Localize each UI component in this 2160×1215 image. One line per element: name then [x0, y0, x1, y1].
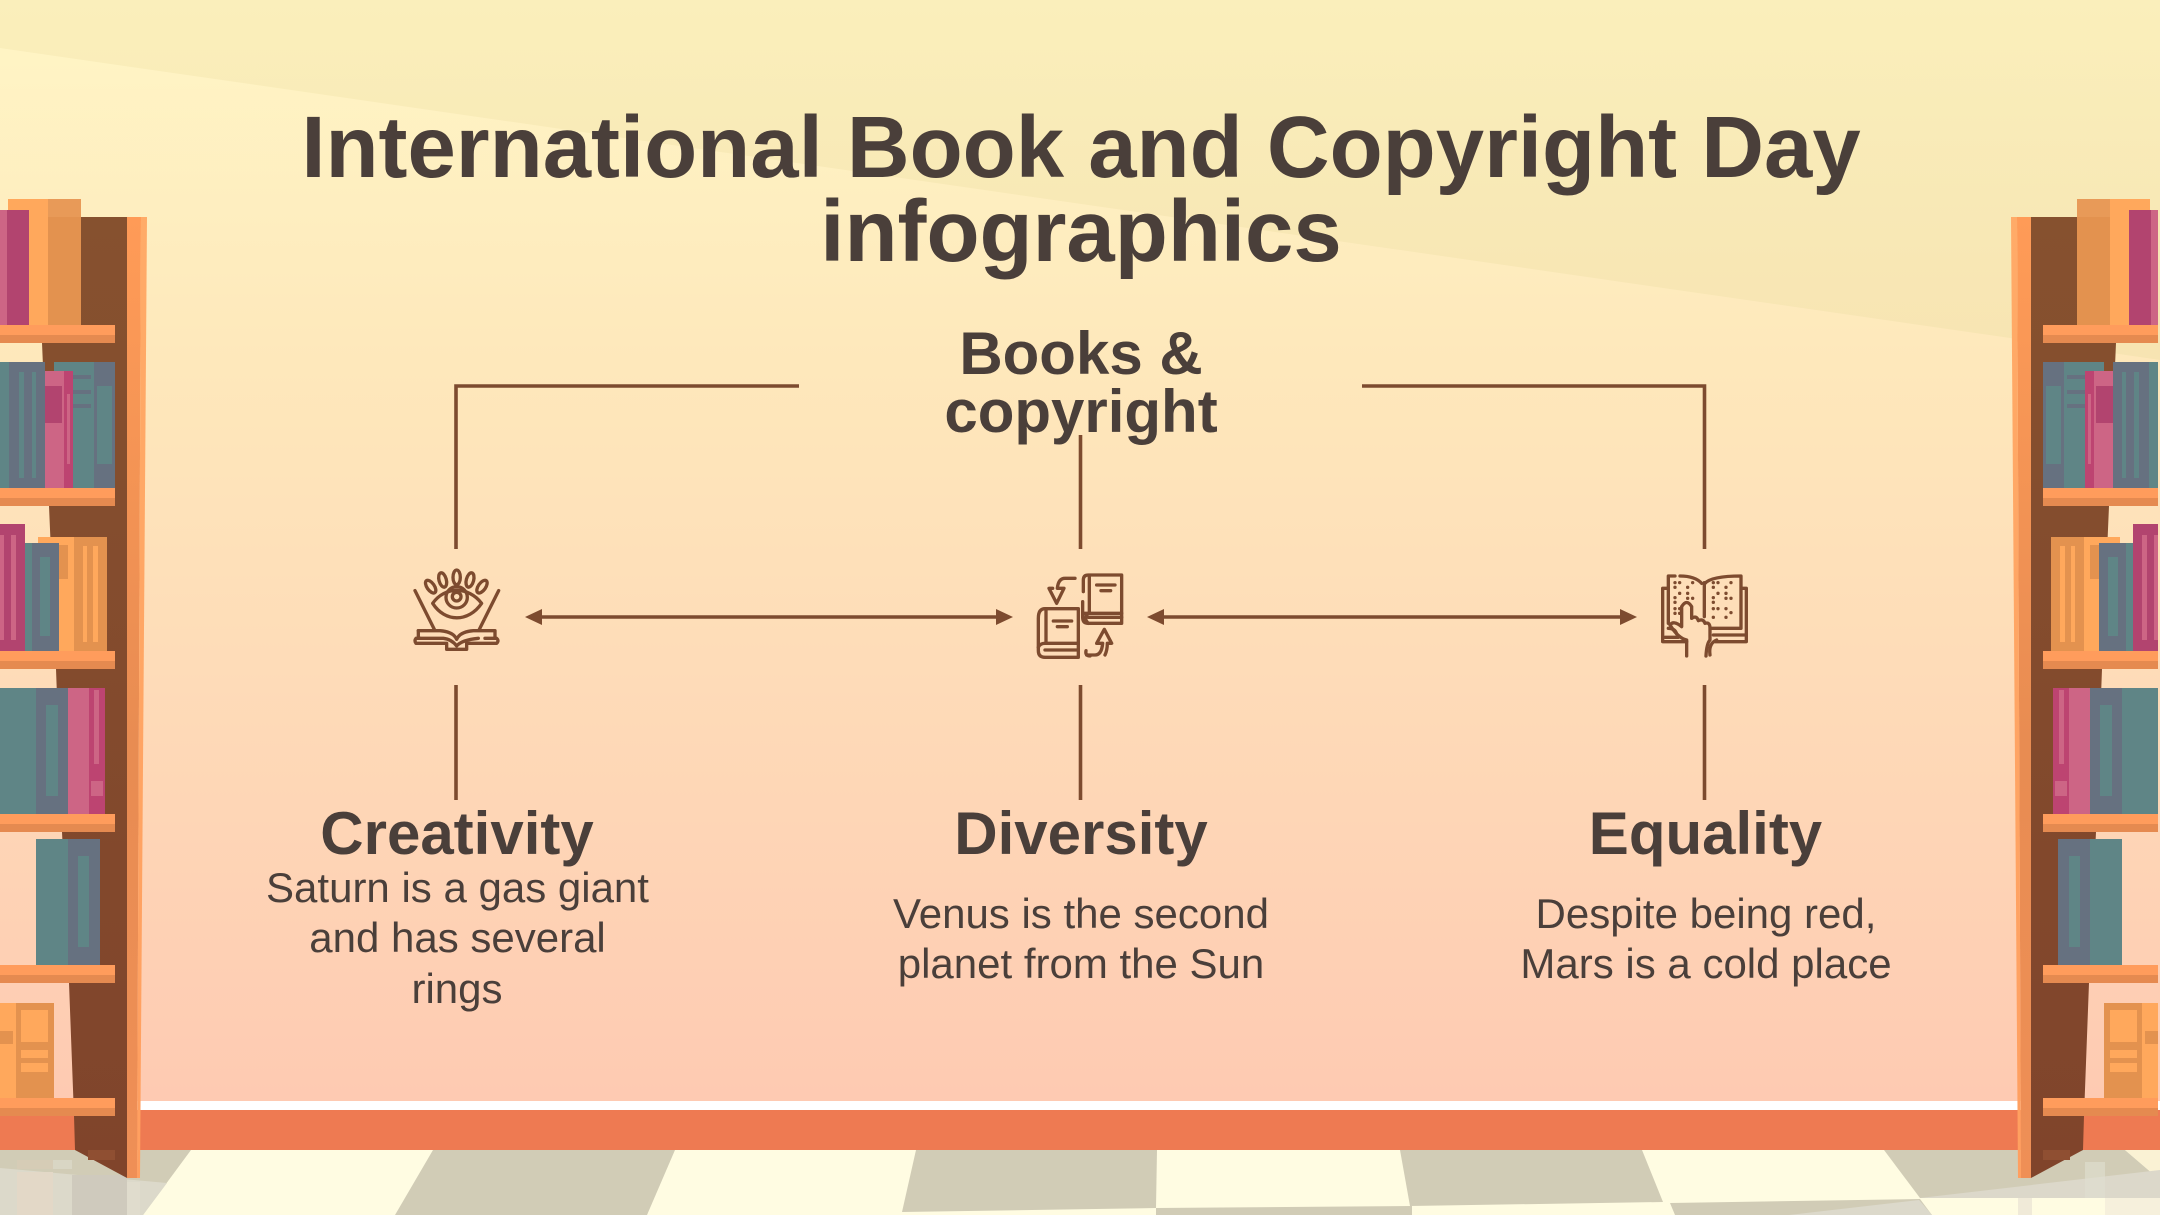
third shelf books	[0, 524, 107, 651]
icon: braille book with hand	[1663, 576, 1746, 656]
block: equality: Despite being red,	[1536, 890, 1876, 937]
second shelf books	[0, 362, 115, 488]
block: equality: Mars is a cold place	[1520, 940, 1892, 987]
top shelf books	[0, 199, 81, 325]
central heading	[944, 320, 1218, 445]
central heading: copyright	[944, 378, 1218, 445]
icon: eye over book	[415, 570, 499, 649]
block: creativity	[266, 800, 649, 1012]
floor reflection left	[0, 1160, 167, 1215]
connector lines	[456, 386, 1704, 800]
block: creativity: and has several	[309, 914, 606, 961]
arrow: diversity to equality	[1147, 609, 1637, 625]
title: International Book and Copyright Day	[301, 99, 1861, 196]
block: diversity: planet from the Sun	[898, 940, 1264, 987]
block: diversity: Diversity	[954, 800, 1208, 867]
block: equality	[1520, 800, 1892, 987]
light beam on wall	[0, 0, 2160, 360]
block: creativity: Saturn is a gas giant	[266, 864, 649, 911]
checkered floor	[0, 1150, 2160, 1215]
arrow: creativity to diversity	[525, 609, 1013, 625]
block: creativity: Creativity	[320, 800, 594, 867]
title: infographics	[820, 183, 1342, 280]
title	[301, 99, 1861, 280]
sixth shelf books	[0, 1003, 54, 1098]
skirting board	[0, 1101, 2160, 1150]
icon: exchanging books	[1038, 575, 1122, 657]
side panel	[127, 217, 147, 1178]
shelves	[0, 325, 115, 1116]
block: diversity	[893, 800, 1269, 987]
bookcase right	[2011, 199, 2158, 1178]
central heading: Books &	[959, 320, 1203, 387]
fourth shelf books	[0, 688, 105, 814]
block: creativity: rings	[411, 965, 503, 1012]
bookcase left	[0, 199, 147, 1178]
fifth shelf books	[36, 839, 100, 965]
block: equality: Equality	[1589, 800, 1823, 867]
floor reflection right	[1789, 1162, 2160, 1215]
block: diversity: Venus is the second	[893, 890, 1269, 937]
